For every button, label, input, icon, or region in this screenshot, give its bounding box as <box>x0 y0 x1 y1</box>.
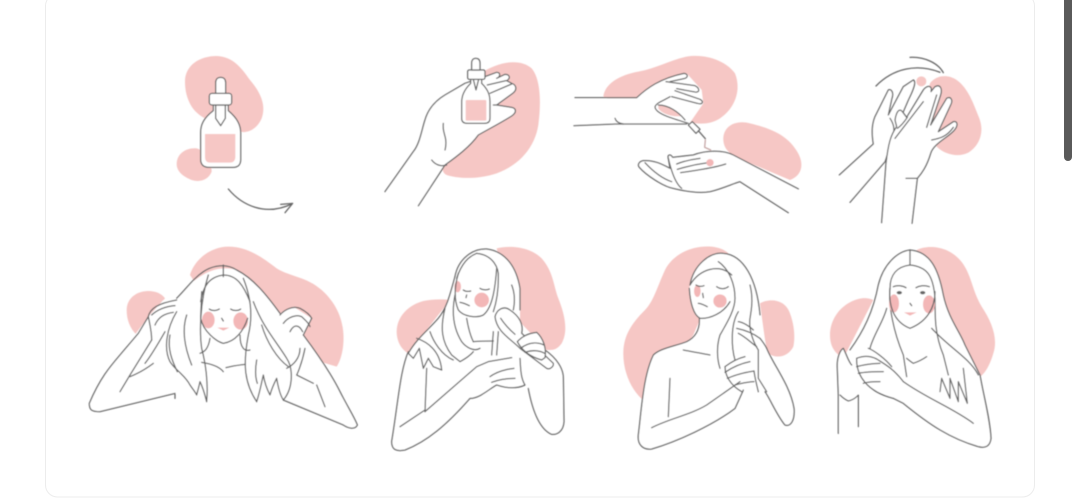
face: woman side tilt <box>689 269 732 318</box>
figure: silhouette <box>392 249 564 451</box>
icon: bottle <box>201 77 241 167</box>
step 2: hand holding bottle <box>385 58 540 206</box>
illustration: all steps <box>89 56 995 451</box>
icon: back hand <box>839 80 915 202</box>
face: woman tilted <box>454 253 498 317</box>
step 1: dropper bottle <box>177 56 263 181</box>
figure: silhouette <box>837 250 991 447</box>
blob: bottle large <box>185 56 263 132</box>
figure: hair <box>850 250 980 403</box>
figure: left hand <box>837 348 858 433</box>
step 5: woman massaging scalp <box>89 247 357 428</box>
blob: right <box>497 247 565 350</box>
figure: lower hand <box>725 357 758 392</box>
blob: hands dot <box>916 76 926 86</box>
figure: hair <box>408 249 520 370</box>
step 4: rubbing hands <box>839 57 981 223</box>
blob: upper <box>603 56 738 124</box>
figure: upper hand <box>737 322 767 348</box>
step 3: dropping oil into palm <box>574 56 801 213</box>
arrow: to next step <box>228 189 293 213</box>
icon: dropper <box>688 122 711 150</box>
icon: upper hand <box>574 73 703 126</box>
blob: left <box>397 299 450 353</box>
figure: silhouette <box>638 253 794 449</box>
blob: lower <box>723 122 801 180</box>
figure: arms and body <box>89 317 357 428</box>
figure: right hand <box>857 348 903 398</box>
icon: hand on brush <box>517 332 545 360</box>
blob: small <box>127 291 165 335</box>
blob: small <box>760 300 794 357</box>
step 8: woman with long hair <box>830 247 995 447</box>
figure: body <box>392 318 564 451</box>
figure: body <box>893 357 991 447</box>
blob: right <box>917 247 995 377</box>
figure: silhouette <box>89 268 357 428</box>
icon: lower cupped hand <box>638 151 798 213</box>
figure: right hand <box>280 307 312 335</box>
blob: left <box>830 298 873 358</box>
figure: hair <box>690 253 767 392</box>
blob: bottle small <box>177 148 212 181</box>
icon: front hand <box>882 86 957 223</box>
face: woman front eyes open <box>889 286 935 328</box>
blob: hand <box>443 62 540 178</box>
icon: small bottle <box>462 58 490 123</box>
blob: large <box>623 246 728 402</box>
blob: large <box>190 247 344 367</box>
figure: left hand <box>148 300 177 340</box>
blob: hands <box>927 76 981 155</box>
motion arcs <box>876 57 943 86</box>
step 6: woman brushing hair <box>392 247 565 451</box>
icon: open hand <box>385 72 516 206</box>
icon: hairbrush <box>495 308 553 369</box>
step 7: woman oiling hair lengths <box>623 246 794 449</box>
figure: hair <box>145 266 300 402</box>
face: woman front eyes closed <box>201 265 250 343</box>
scrollbar <box>1064 0 1072 161</box>
figure: body <box>638 318 794 449</box>
